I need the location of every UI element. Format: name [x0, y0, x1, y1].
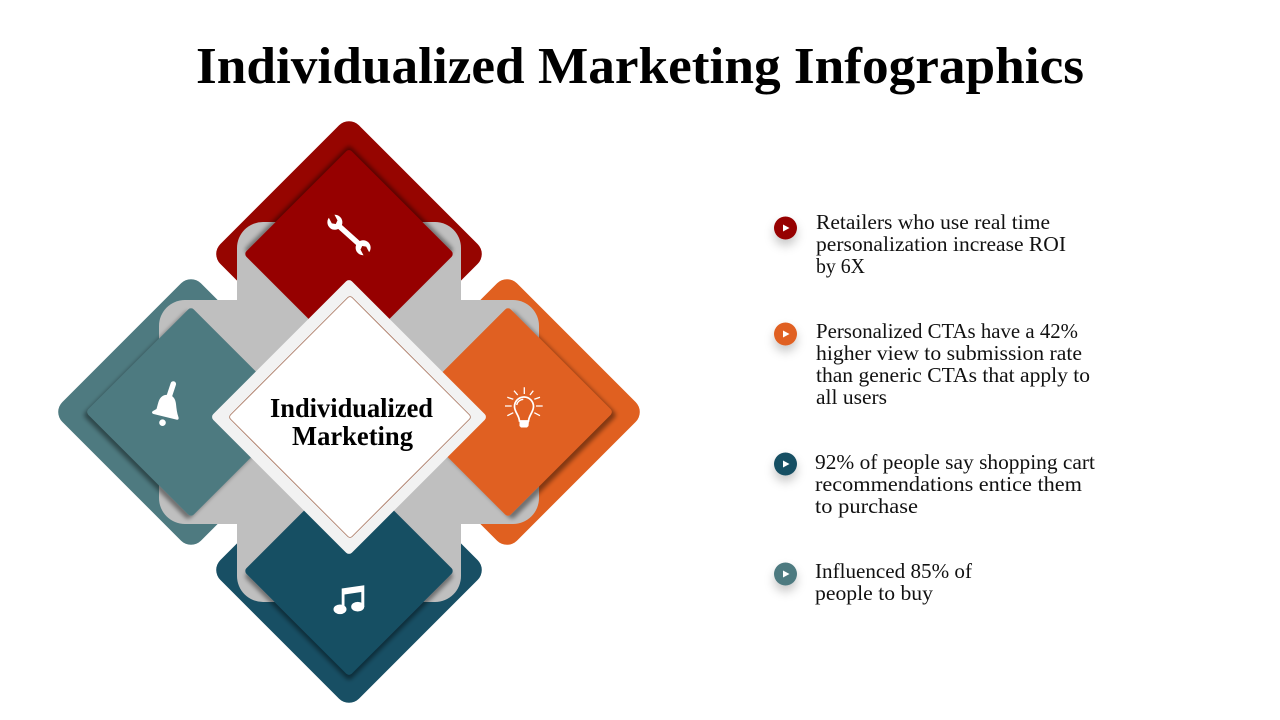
outer diamond: red [210, 115, 488, 393]
list item 1 [774, 210, 1066, 278]
text: item 4: Influenced 85% of [815, 559, 973, 583]
icon: bell [152, 384, 179, 426]
outer diamond: navy [210, 431, 488, 709]
text: item 2: all users [816, 385, 887, 409]
text: item 1 [816, 210, 1066, 278]
text: item 2: Personalized CTAs have a 42% [816, 319, 1078, 343]
list item 4 [774, 559, 973, 605]
list item 2 [774, 319, 1090, 409]
centre label: Individualized [270, 393, 433, 423]
text: item 1: personalization increase ROI [816, 232, 1066, 256]
inner diamond: orange [403, 307, 613, 517]
text: item 1: Retailers who use real time [816, 210, 1050, 234]
centre label [270, 393, 433, 451]
bullet: navy [774, 452, 797, 476]
centre label: Marketing [292, 421, 413, 451]
icon: light bulb [505, 387, 543, 428]
text: item 3: recommendations entice them [815, 472, 1082, 496]
inner diamond: teal [86, 307, 296, 517]
grey cross [159, 222, 539, 602]
diagram: diamond cluster [52, 115, 646, 709]
text: item 2: higher view to submission rate [816, 341, 1082, 365]
centre diamond [210, 278, 488, 556]
icon: music notes [334, 585, 364, 614]
title: Individualized Marketing Infographics [196, 38, 1084, 95]
inner diamond: navy [244, 466, 454, 676]
outer diamond: orange [368, 273, 646, 551]
text: item 3 [815, 450, 1095, 518]
text: item 3: 92% of people say shopping cart [815, 450, 1095, 474]
text: item 1: by 6X [816, 254, 865, 278]
text: item 2: than generic CTAs that apply to [816, 363, 1090, 387]
outer diamond: teal [52, 273, 330, 551]
bullet: teal [774, 562, 797, 586]
text: item 2 [816, 319, 1090, 409]
text: item 4 [815, 559, 973, 605]
icon: wrench [322, 210, 376, 260]
bullet: orange [774, 322, 797, 346]
text: item 3: to purchase [815, 494, 918, 518]
list item 3 [774, 450, 1095, 518]
inner diamond: red [244, 149, 454, 359]
bullet: red [774, 216, 797, 240]
text: item 4: people to buy [815, 581, 933, 605]
